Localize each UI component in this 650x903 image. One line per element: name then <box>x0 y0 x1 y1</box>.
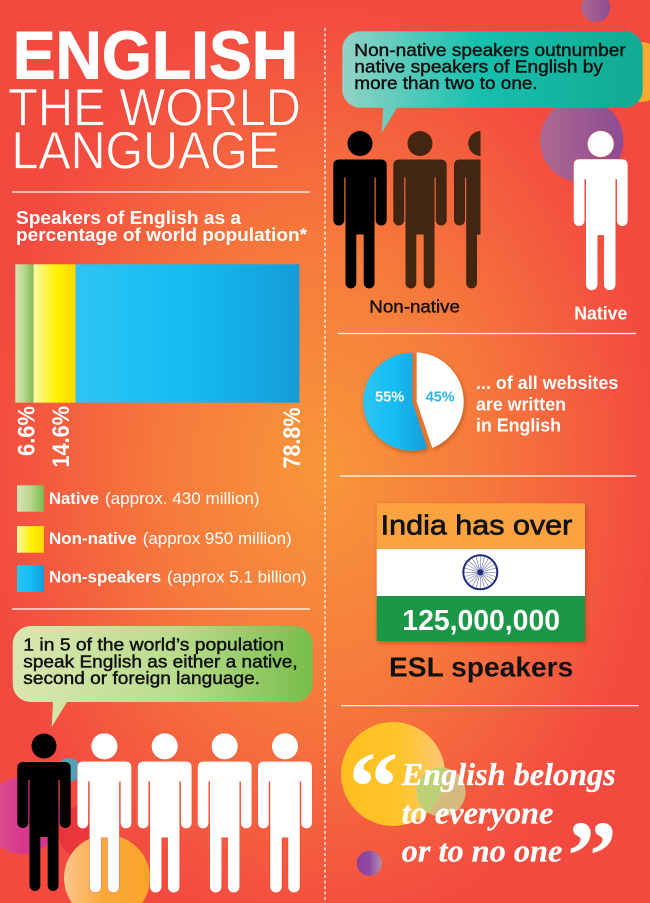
legend: Non-speakers <box>49 568 161 587</box>
legend: Native <box>49 489 99 508</box>
pie chart: websites <box>363 352 464 451</box>
title: ENGLISH <box>13 18 298 94</box>
speech bubble: non-native outnumber: native speakers of English by <box>354 57 603 77</box>
text: websites: in English <box>476 416 561 436</box>
heading: speakers chart: Speakers of English as a <box>16 208 242 228</box>
bar value labels: 14.6% <box>48 406 75 468</box>
title: THE WORLD <box>8 78 301 138</box>
legend <box>17 485 307 592</box>
decorative circles: top right <box>540 0 650 182</box>
legend: Non-native <box>49 529 137 548</box>
legend: (approx. 430 million) <box>105 489 260 508</box>
person: native <box>574 131 628 290</box>
title: LANGUAGE <box>12 122 280 180</box>
label: non-native: Non-native <box>369 297 460 317</box>
legend: (approx 950 million) <box>143 529 292 548</box>
india flag panel: 125,000,000 <box>402 605 560 637</box>
bar value labels: 6.6% <box>14 406 40 456</box>
heading: speakers chart: percentage of world population* <box>16 225 307 245</box>
speech bubble: one in five <box>13 626 313 727</box>
bar value labels <box>14 406 306 468</box>
pie chart: websites: 55% <box>375 389 404 406</box>
pie chart: websites: 45% <box>426 389 455 406</box>
stacked bar chart <box>15 264 299 403</box>
text: websites: ... of all websites <box>476 373 618 393</box>
icon: ashoka chakra <box>463 555 497 589</box>
quote: English belongs <box>401 756 616 792</box>
label: ESL speakers: ESL speakers <box>389 652 573 683</box>
legend: (approx 5.1 billion) <box>167 568 307 587</box>
quote: or to no one <box>402 833 562 869</box>
title <box>8 18 301 180</box>
people: one in five <box>17 733 312 893</box>
speech bubble: non-native outnumber: more than two to one. <box>354 73 538 93</box>
speech bubble: one in five: second or foreign language. <box>23 668 260 688</box>
quote: to everyone <box>402 794 553 830</box>
text: websites <box>476 373 618 436</box>
text: websites: are written <box>476 395 566 415</box>
decorative circles: bottom left <box>0 758 150 903</box>
speech bubble: non-native outnumber: Non-native speakers outnumber <box>354 40 626 60</box>
speech bubble: non-native outnumber <box>342 31 643 133</box>
quote <box>348 731 617 903</box>
label: native: Native <box>574 303 627 323</box>
speech bubble: one in five: speak English as either a native, <box>23 651 298 671</box>
bar value labels: 78.8% <box>279 408 306 468</box>
people: non-native <box>333 131 480 288</box>
india flag panel <box>377 503 585 641</box>
heading: speakers chart <box>16 208 307 245</box>
india flag panel: India has over <box>381 509 572 540</box>
quote: “ <box>348 731 398 842</box>
decorative circles: quote area <box>341 722 466 876</box>
speech bubble: one in five: 1 in 5 of the world’s population <box>23 635 284 655</box>
